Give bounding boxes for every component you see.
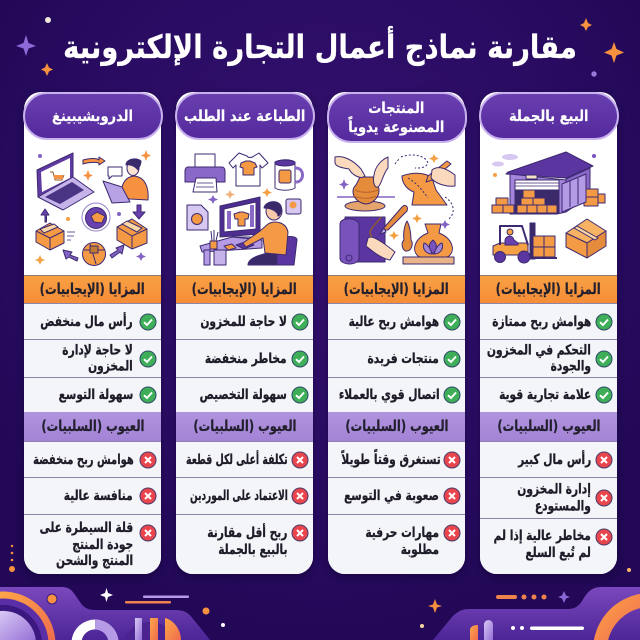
advantage row — [24, 339, 161, 377]
card heading: الطباعة عند الطلب — [184, 106, 305, 124]
disadvantage row: رأس مال كبير — [518, 451, 591, 467]
advantage row: سهولة التخصيص — [200, 387, 287, 403]
title: مقارنة نماذج أعمال التجارة الإلكترونية — [63, 28, 577, 66]
card heading: المصنوعة يدوياً — [348, 118, 445, 136]
card: handmade products — [326, 92, 468, 579]
advantage row — [176, 303, 313, 339]
advantage row: هوامش ربح ممتازة — [492, 313, 591, 329]
disadvantage row: جودة المنتج — [72, 536, 133, 552]
advantage row: رأس مال منخفض — [41, 313, 133, 329]
disadvantage row: المنتج والشحن — [56, 553, 133, 569]
disadvantage row: تكلفة أعلى لكل قطعة — [186, 451, 288, 467]
disadvantage row: مطلوبة — [401, 542, 439, 558]
advantage row — [176, 339, 313, 377]
disadvantage row: تستغرق وقتاً طويلاً — [342, 451, 441, 467]
disadvantage row: الاعتماد على الموردين — [190, 488, 288, 504]
disadvantages heading — [176, 412, 313, 441]
advantage row: المخزون — [88, 358, 133, 374]
disadvantage row: مخاطر عالية إذا لم — [494, 528, 591, 544]
advantages heading: المزايا (الإيجابيات) — [496, 280, 601, 298]
advantage row — [176, 377, 313, 412]
advantage row: لا حاجة للمخزون — [200, 313, 287, 329]
advantages heading: المزايا (الإيجابيات) — [40, 280, 145, 298]
disadvantages heading: العيوب (السلبيات) — [41, 417, 144, 435]
advantages heading — [480, 275, 617, 303]
advantages heading: المزايا (الإيجابيات) — [192, 280, 297, 298]
illustration: wholesale — [492, 152, 606, 263]
card heading — [326, 92, 466, 143]
disadvantage row: صعوبة في التوسع — [344, 488, 439, 504]
card heading: الدروبشيبينغ — [52, 106, 133, 124]
disadvantage row — [24, 477, 161, 514]
disadvantage row: لم تُبع السلع — [526, 544, 591, 560]
card heading: البيع بالجملة — [509, 106, 588, 124]
advantage row — [480, 303, 617, 339]
disadvantage row — [24, 514, 161, 574]
card: print on demand — [174, 92, 316, 579]
card: wholesale — [478, 92, 619, 578]
disadvantage row — [480, 477, 617, 518]
advantage row — [328, 303, 465, 339]
disadvantage row: هوامش ربح منخفضة — [33, 451, 134, 467]
card heading — [478, 92, 618, 140]
advantage row — [328, 377, 465, 412]
disadvantage row — [480, 441, 617, 477]
disadvantage row: منافسة عالية — [64, 488, 133, 504]
advantage row: مخاطر منخفضة — [205, 350, 287, 366]
disadvantage row — [328, 477, 465, 514]
advantages heading: المزايا (الإيجابيات) — [344, 280, 449, 298]
advantage row: لا حاجة لإدارة — [62, 342, 133, 358]
disadvantages heading — [328, 412, 465, 441]
advantages heading — [328, 275, 465, 303]
advantage row: اتصال قوي بالعملاء — [339, 387, 440, 403]
disadvantage row: مهارات حرفية — [365, 525, 439, 541]
card: dropshipping — [22, 92, 164, 578]
card heading — [22, 92, 162, 140]
advantage row: هوامش ربح عالية — [348, 313, 439, 329]
illustration: dropshipping — [35, 150, 151, 266]
disadvantages heading — [480, 412, 617, 441]
advantage row — [328, 339, 465, 377]
illustration: print on demand — [185, 153, 302, 265]
card heading: المنتجات — [368, 98, 425, 116]
disadvantage row — [328, 441, 465, 477]
disadvantage row — [176, 441, 313, 477]
advantage row: منتجات فريدة — [368, 350, 439, 366]
disadvantage row: ربح أقل مقارنة — [207, 525, 287, 541]
disadvantage row: إدارة المخزون — [517, 482, 591, 498]
advantage row: التحكم في المخزون — [487, 342, 591, 358]
card heading — [174, 92, 314, 140]
disadvantages heading: العيوب (السلبيات) — [193, 417, 296, 435]
advantage row: والجودة — [551, 358, 591, 374]
disadvantage row: قلة السيطرة على — [39, 520, 133, 536]
disadvantages heading: العيوب (السلبيات) — [497, 417, 600, 435]
advantage row: علامة تجارية قوية — [499, 387, 591, 403]
advantages heading — [24, 275, 161, 303]
disadvantages heading — [24, 412, 161, 441]
advantage row — [24, 377, 161, 412]
disadvantage row: بالبيع بالجملة — [218, 542, 287, 558]
disadvantages heading: العيوب (السلبيات) — [345, 417, 448, 435]
illustration: handmade — [335, 154, 455, 264]
disadvantage row — [176, 477, 313, 514]
advantage row — [480, 377, 617, 412]
disadvantage row — [480, 518, 617, 574]
advantage row — [480, 339, 617, 377]
advantages heading — [176, 275, 313, 303]
advantage row — [24, 303, 161, 339]
disadvantage row — [176, 514, 313, 574]
advantage row: سهولة التوسع — [58, 387, 133, 403]
disadvantage row — [24, 441, 161, 477]
disadvantage row: والمستودع — [535, 498, 591, 514]
disadvantage row — [328, 514, 465, 574]
